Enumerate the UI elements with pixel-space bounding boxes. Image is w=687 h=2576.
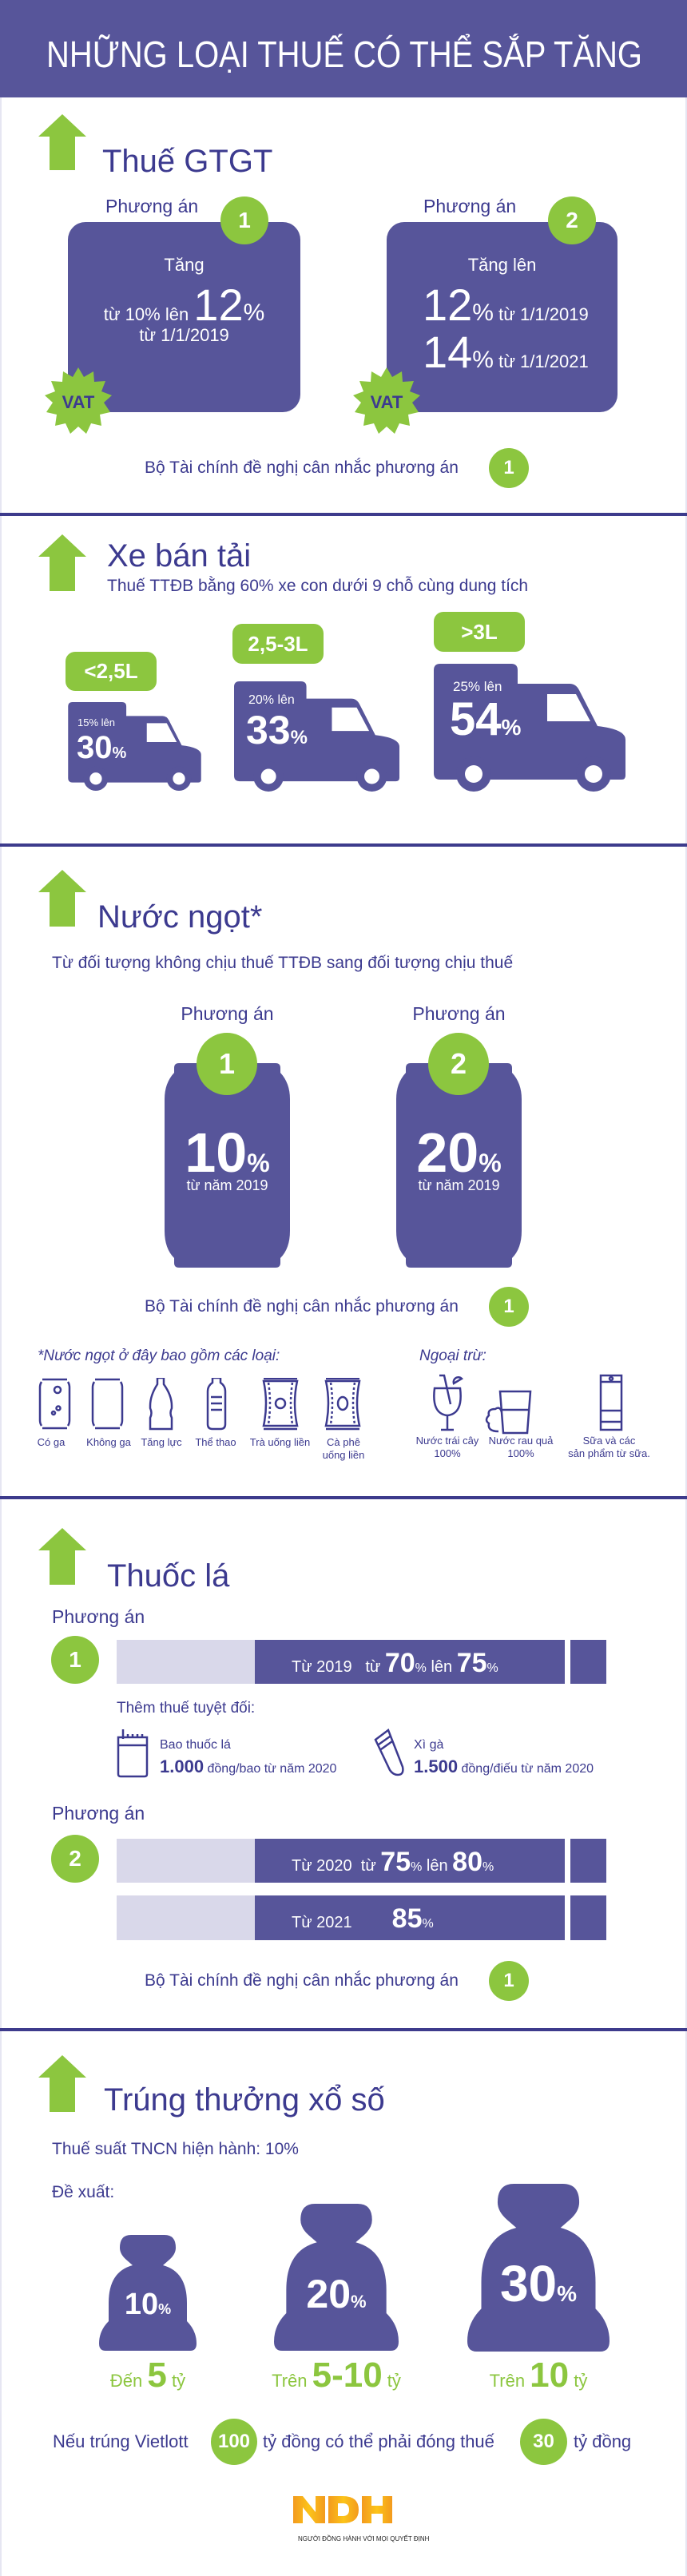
icon: water bottle [208,1378,225,1429]
included labels: Trà uống liền [250,1436,310,1448]
exception icons [433,1374,623,1435]
icon: arrow up [38,114,86,170]
truck 3: 54% [450,693,521,745]
icon: VAT star 2 [353,367,420,434]
bag 1: Đến 5 tỷ [110,2356,185,2395]
bag 1 [99,2235,197,2395]
can 1 [165,1003,290,1268]
logo [293,2496,429,2542]
can 2: từ năm 2019 [418,1177,500,1193]
heading: Thuế GTGT [102,144,272,179]
exception labels: 100% [507,1447,534,1459]
exception labels: Sữa và các [583,1435,635,1447]
cigarette text: 1.000 đồng/bao từ năm 2020 [160,1756,336,1776]
included drink icons [38,1378,361,1430]
exception labels: Nước rau quả [489,1435,553,1447]
icon: cigarette pack [117,1729,149,1778]
badge 2 [548,196,596,244]
included labels: uống liền [323,1449,364,1461]
absolute tax heading: Thêm thuế tuyệt đối: [117,1700,255,1717]
heading: Thuốc lá [107,1558,229,1594]
panel: VAT [38,114,618,488]
heading: Xe bán tải [107,538,251,574]
option 1 box: từ 10% lên 12% [104,280,264,330]
option 1 box [68,222,300,412]
icon: arrow up [38,534,86,591]
Vietlott note: Nếu trúng Vietlott [53,2431,189,2451]
badge 1: 1 [238,208,251,232]
bar option 1: Từ 2019 từ 70% lên 75% [292,1648,498,1678]
cigar text [414,1738,594,1776]
icon: cocktail [434,1375,462,1430]
option 2 label: Phương án [52,1803,145,1824]
truck 1: <2,5L [84,659,138,683]
icon: VAT star 2: VAT [371,392,403,412]
badge 1 [51,1636,99,1684]
included labels [38,1436,364,1461]
side borders [0,97,2,2576]
option 1 box: từ 1/1/2019 [139,325,229,345]
truck 2: 2,5-3L [248,631,308,655]
bag 1: 10% [125,2288,171,2321]
icon: juice glass with lettuce [486,1391,530,1433]
panel: lottery [38,2055,631,2542]
heading: Trúng thưởng xổ số [104,2082,385,2118]
recommendation [145,448,529,488]
footnote heading: *Nước ngọt ở đây bao gồm các loại: [38,1348,280,1364]
panel: soft drinks [38,870,650,1461]
icon: arrow up [38,2055,86,2112]
heading: Nước ngọt* [97,899,262,935]
current rate: Thuế suất TNCN hiện hành: 10% [52,2140,299,2158]
truck 3 [434,612,625,792]
icon: VAT star 1: VAT [62,392,95,412]
recommendation [145,1287,529,1327]
exception labels: sản phẩm từ sữa. [568,1447,650,1459]
bag 2: 20% [306,2272,367,2316]
badge 2 [51,1835,99,1883]
cigar text: Xì gà [414,1738,443,1752]
bag 2 [272,2204,401,2395]
can 2: Phương án [412,1003,506,1024]
can 2: 2 [451,1047,467,1080]
icon: coffee pack [326,1379,359,1429]
header banner [0,0,687,97]
exception labels: Nước trái cây [416,1435,479,1447]
cigar text: 1.500 đồng/điếu từ năm 2020 [414,1756,594,1776]
Vietlott note: tỷ đồng [574,2431,631,2451]
bar option 2a [117,1839,606,1883]
truck 3: >3L [461,620,498,644]
truck 1: 30% [77,730,126,765]
can 1: 1 [219,1047,235,1080]
option 2 box [387,222,618,412]
included labels: Không ga [86,1436,131,1448]
can 1: từ năm 2019 [186,1177,268,1193]
can 2: 20% [416,1121,502,1184]
cigarette text: Bao thuốc lá [160,1738,231,1752]
included labels: Thể thao [195,1436,236,1448]
icon: milk carton [601,1375,621,1430]
exception labels [416,1435,650,1459]
truck 2: 20% lên [248,693,295,707]
panel: pickup trucks [38,534,625,792]
Vietlott note: 30 [533,2431,554,2452]
icon: soda can [40,1379,69,1428]
bag 2: Trên 5-10 tỷ [272,2356,401,2395]
bar option 2b: Từ 2021 85% [292,1903,434,1934]
recommendation: Bộ Tài chính đề nghị cân nhắc phương án [145,458,459,477]
included labels: Có ga [38,1436,65,1448]
recommendation: 1 [503,1296,514,1317]
exception labels: 100% [434,1447,461,1459]
bar option 2a: Từ 2020 từ 75% lên 80% [292,1847,494,1877]
recommendation: Bộ Tài chính đề nghị cân nhắc phương án [145,1297,459,1316]
logo: NGƯỜI ĐỒNG HÀNH VỚI MỌI QUYẾT ĐỊNH [298,2535,429,2542]
icon: arrow up [38,1528,86,1585]
truck 1 [66,652,201,791]
icon: VAT star 1 [45,367,112,434]
bag 3 [467,2184,610,2395]
Vietlott note [53,2419,631,2465]
truck 3: 25% lên [453,679,502,694]
option 2 label: Phương án [423,196,516,216]
can 2 [396,1003,522,1268]
icon: arrow up [38,870,86,927]
badge 1: 1 [69,1647,81,1672]
option 2 box: Tăng lên [468,255,536,275]
subtitle: Từ đối tượng không chịu thuế TTĐB sang đối tượng chịu thuế [52,954,513,972]
badge 2: 2 [69,1846,81,1871]
recommendation: Bộ Tài chính đề nghị cân nhắc phương án [145,1971,459,1990]
icon: still can [93,1379,122,1428]
recommendation: 1 [503,457,514,478]
truck 2: 33% [246,708,308,752]
option 2 box: 12% từ 1/1/2019 [423,280,589,330]
option 2 box: 14% từ 1/1/2021 [423,327,589,377]
truck 2 [232,624,399,792]
bag 3: 30% [500,2255,577,2312]
option 1 label: Phương án [52,1606,145,1627]
truck 1: 15% lên [77,716,115,728]
bar option 1 [117,1640,606,1684]
exceptions heading: Ngoại trừ: [419,1348,486,1364]
Vietlott note: tỷ đồng có thể phải đóng thuế [263,2431,494,2451]
option 1 label: Phương án [105,196,198,216]
recommendation [145,1961,529,2001]
proposal label: Đề xuất: [52,2183,114,2201]
subtitle: Thuế TTĐB bằng 60% xe con dưới 9 chỗ cùng dung tích [107,577,528,595]
bar option 2b [117,1895,606,1940]
included labels: Tăng lực [141,1436,182,1448]
panel: tobacco [38,1528,606,2001]
icon: cigar [374,1729,404,1776]
icon: glass bottle [150,1378,172,1429]
can 1: 10% [185,1121,270,1184]
badge 1 [220,196,268,244]
badge 2: 2 [566,208,578,232]
icon: tea pack [264,1379,297,1429]
included labels: Cà phê [327,1436,360,1448]
bag 3: Trên 10 tỷ [490,2356,587,2395]
cigarette text [160,1738,336,1776]
can 1: Phương án [181,1003,274,1024]
recommendation: 1 [503,1970,514,1991]
option 1 box: Tăng [164,255,205,275]
Vietlott note: 100 [218,2431,250,2452]
